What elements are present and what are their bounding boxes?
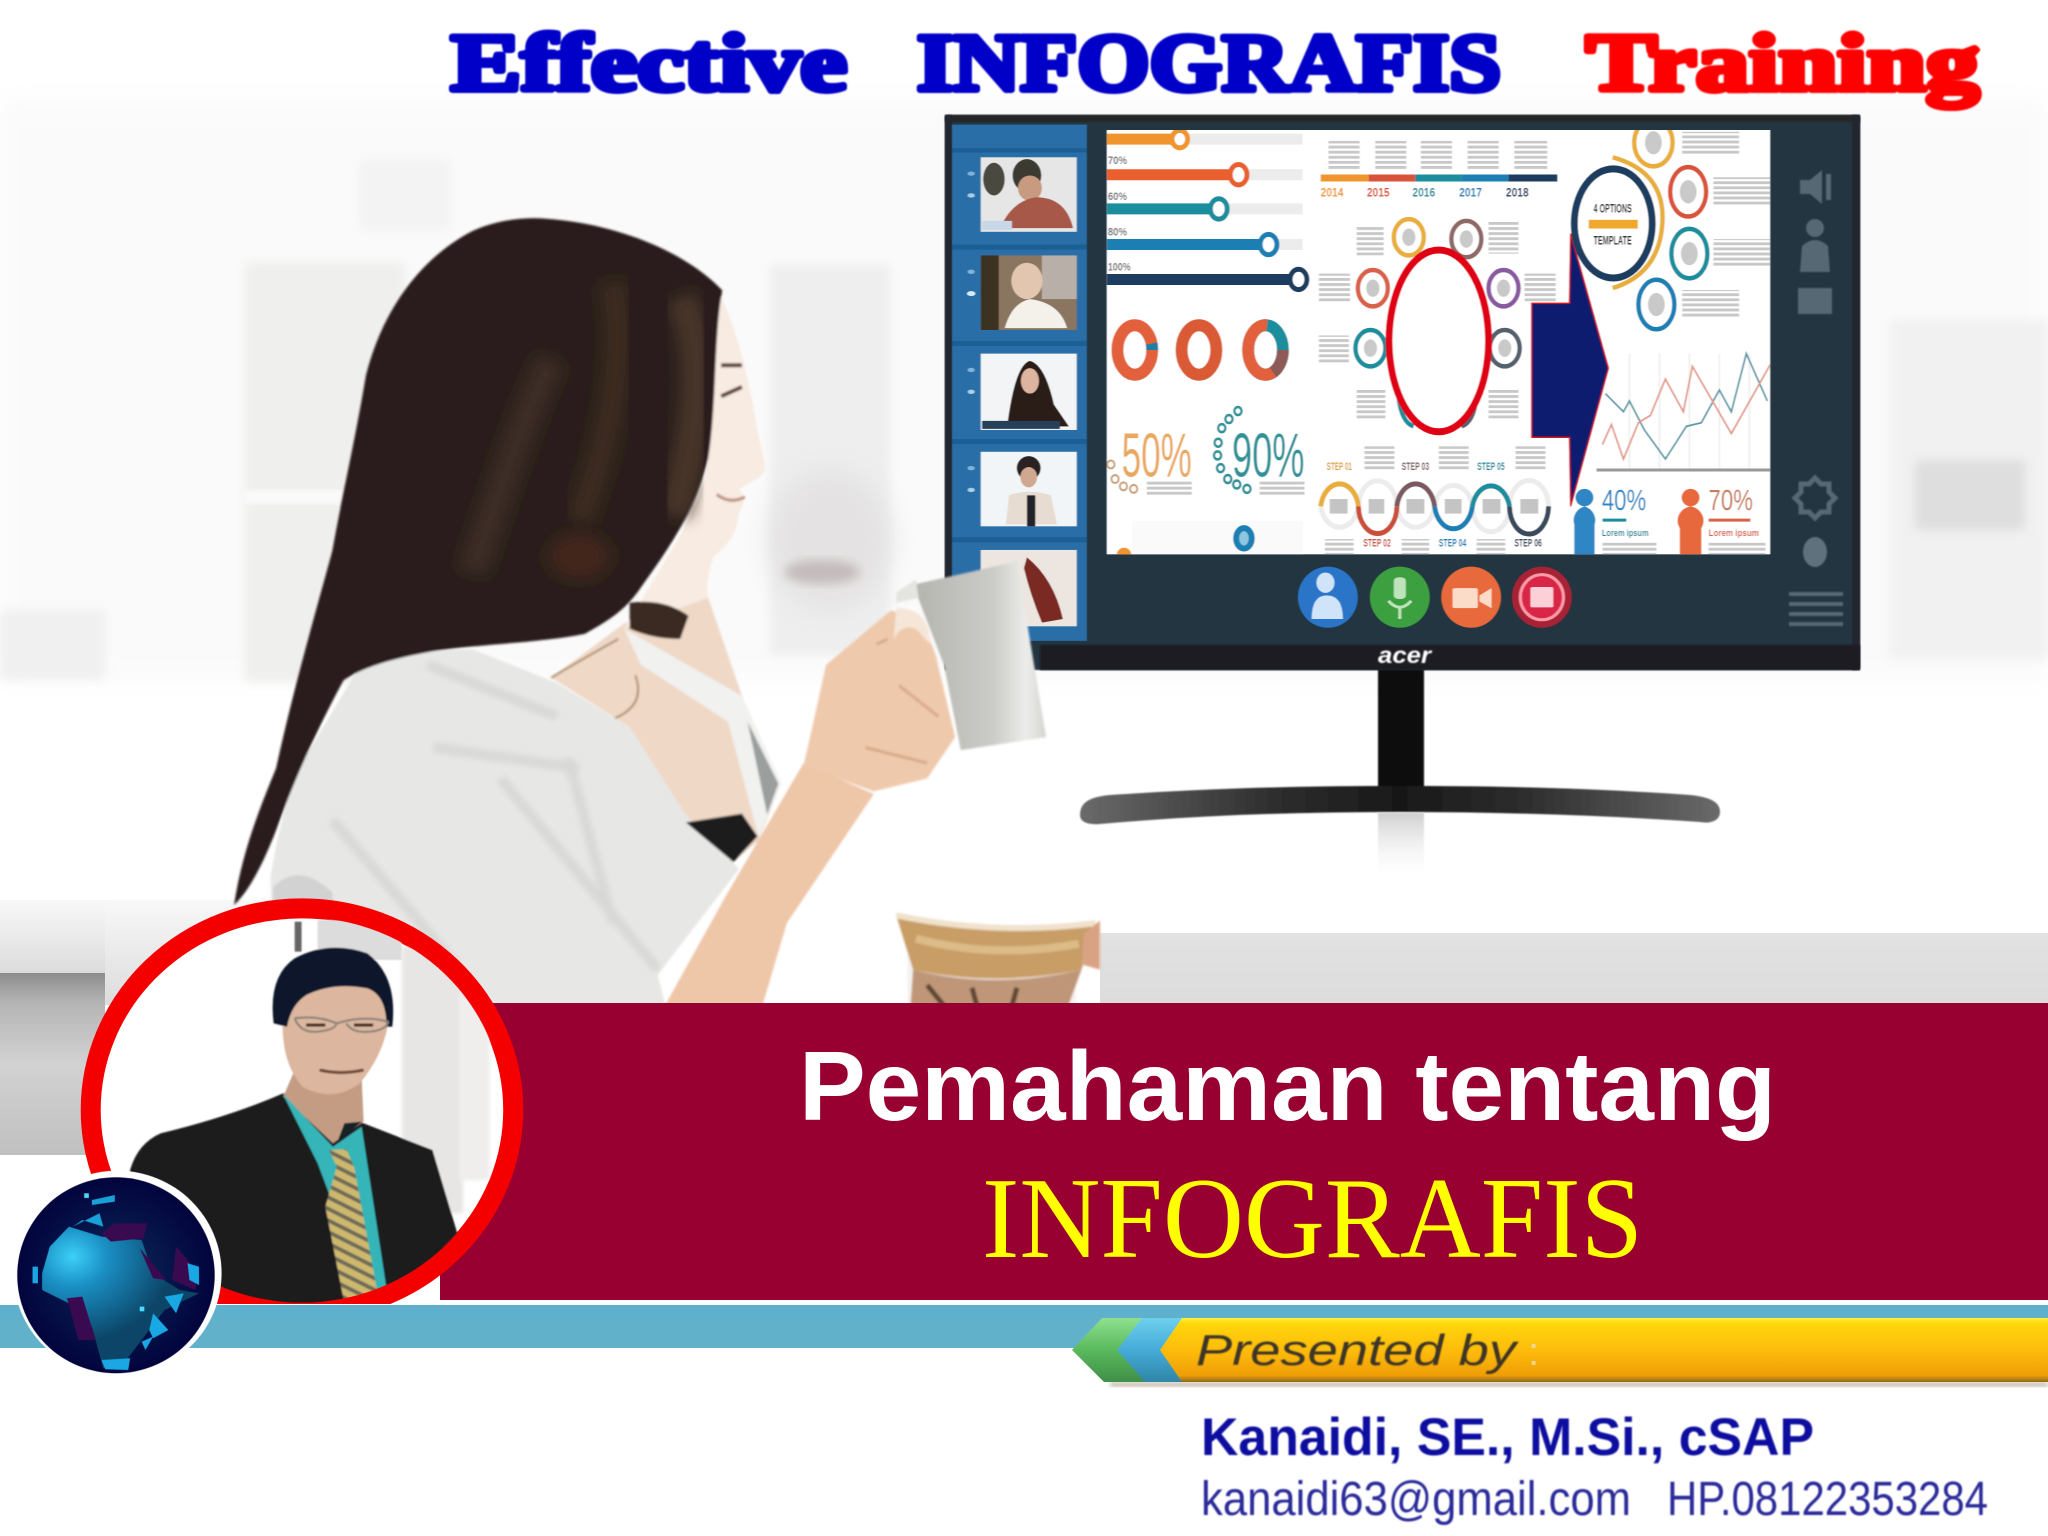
shirt — [271, 649, 739, 1008]
yellow bar — [1160, 1318, 2048, 1382]
percentage labels: 80% — [1108, 227, 1127, 238]
timeline: 2014 — [1321, 186, 1344, 199]
white slide — [1107, 130, 1770, 554]
90 percent stat — [1214, 407, 1304, 495]
eyes — [306, 1023, 373, 1026]
mug — [913, 562, 1046, 750]
screen contents — [952, 119, 1770, 641]
presented by text: Presented by — [1196, 1326, 1520, 1375]
red ring — [91, 908, 513, 1312]
timeline: 2016 — [1412, 186, 1435, 199]
step snake diagram — [1321, 446, 1548, 554]
monitor chin — [1040, 645, 1860, 670]
contact details: kanaidi63@gmail.com — [1201, 1473, 1631, 1526]
line chart — [1596, 354, 1770, 470]
percentage labels — [1108, 155, 1131, 274]
monitor frame — [945, 115, 1860, 670]
bra — [686, 814, 758, 862]
presented by banner — [1072, 1318, 2048, 1387]
head — [283, 981, 388, 1094]
photo — [130, 920, 490, 1304]
neck and chest — [551, 598, 781, 864]
arm — [663, 763, 874, 1008]
banner heading: Pemahaman tentang — [799, 1031, 1776, 1141]
screen contents: STEP 06 — [1514, 538, 1542, 549]
step snake diagram: STEP 04 — [1439, 538, 1467, 549]
circular diagram — [1319, 219, 1556, 432]
people stats: 70% — [1709, 484, 1753, 517]
banner subject: INFOGRAFIS — [982, 1155, 1643, 1282]
people stats: 40% — [1602, 484, 1646, 517]
participant panel — [952, 125, 1087, 641]
contact details: HP.08122353284 — [1667, 1473, 1988, 1526]
banner shadow — [1110, 1382, 2048, 1387]
50 percent stat — [1106, 433, 1192, 495]
long dark hair — [234, 218, 722, 905]
video thumbnail 1 — [981, 157, 1077, 232]
button: participants — [1298, 567, 1358, 628]
timeline — [1321, 141, 1557, 199]
people stats: Lorem ipsum — [1602, 527, 1649, 538]
glasses — [295, 1017, 388, 1032]
suit jacket — [130, 1093, 457, 1304]
teal shirt — [282, 1093, 387, 1301]
mouth — [320, 1070, 364, 1072]
face — [624, 288, 765, 629]
timeline: 2018 — [1506, 186, 1529, 199]
screen contents: 50% — [1122, 421, 1192, 490]
colon: : — [1528, 1330, 1539, 1374]
step snake diagram: STEP 01 — [1327, 461, 1352, 473]
people stats — [1574, 484, 1766, 554]
Africa landmass — [42, 1227, 199, 1368]
presenter name: Kanaidi, SE., M.Si., cSAP — [1201, 1408, 1814, 1467]
maroon banner — [440, 1003, 2048, 1300]
screen contents: 90% — [1232, 421, 1304, 490]
lower left faint chart — [1116, 525, 1303, 554]
presenter portrait — [13, 908, 513, 1376]
navy arrow — [1532, 234, 1608, 506]
globe logo — [13, 1171, 222, 1376]
green chevron — [1072, 1318, 1150, 1382]
video thumbnail 2 — [981, 255, 1077, 330]
donut charts — [1117, 325, 1283, 375]
necklace — [551, 639, 638, 719]
hand — [804, 611, 955, 791]
option rings — [1574, 119, 1770, 329]
timeline: 2015 — [1367, 186, 1390, 199]
title — [451, 17, 1979, 108]
contact details — [1201, 1473, 1988, 1526]
option rings: TEMPLATE — [1593, 234, 1632, 247]
progress bars — [1107, 130, 1307, 290]
shirt collar — [624, 629, 781, 838]
hair — [273, 948, 393, 1027]
step snake diagram: STEP 02 — [1363, 538, 1391, 549]
teal band — [0, 1305, 2048, 1348]
striped tie — [325, 1149, 377, 1304]
percentage labels: 60% — [1108, 191, 1127, 203]
screen contents: 100% — [1108, 262, 1131, 274]
timeline: 2017 — [1459, 186, 1482, 199]
brand logo: acer — [1378, 642, 1432, 668]
button: microphone — [1370, 567, 1430, 628]
video thumbnail 5 — [981, 550, 1077, 626]
meeting control buttons — [1298, 567, 1572, 628]
wooden plate held by second person — [896, 915, 1100, 1008]
button: camera — [1441, 567, 1501, 628]
monitor stand — [1080, 660, 1720, 883]
button: stop — [1512, 567, 1572, 628]
title: INFOGRAFIS — [917, 17, 1501, 108]
monitor — [945, 115, 1860, 883]
step snake diagram: STEP 03 — [1402, 461, 1429, 473]
woman with coffee mug — [234, 218, 1100, 1008]
option rings: 4 OPTIONS — [1593, 202, 1632, 215]
neck — [283, 1070, 364, 1143]
title: Effective — [451, 17, 847, 108]
video thumbnail 3 — [981, 354, 1077, 430]
right toolbar icons — [1789, 170, 1843, 626]
percentage labels: 70% — [1108, 155, 1127, 167]
people stats: Lorem ipsum — [1709, 527, 1759, 538]
title: Training — [1586, 17, 1979, 108]
blue chevron — [1117, 1318, 1190, 1382]
video thumbnail 4 — [981, 452, 1077, 526]
step snake diagram: STEP 05 — [1477, 461, 1505, 473]
